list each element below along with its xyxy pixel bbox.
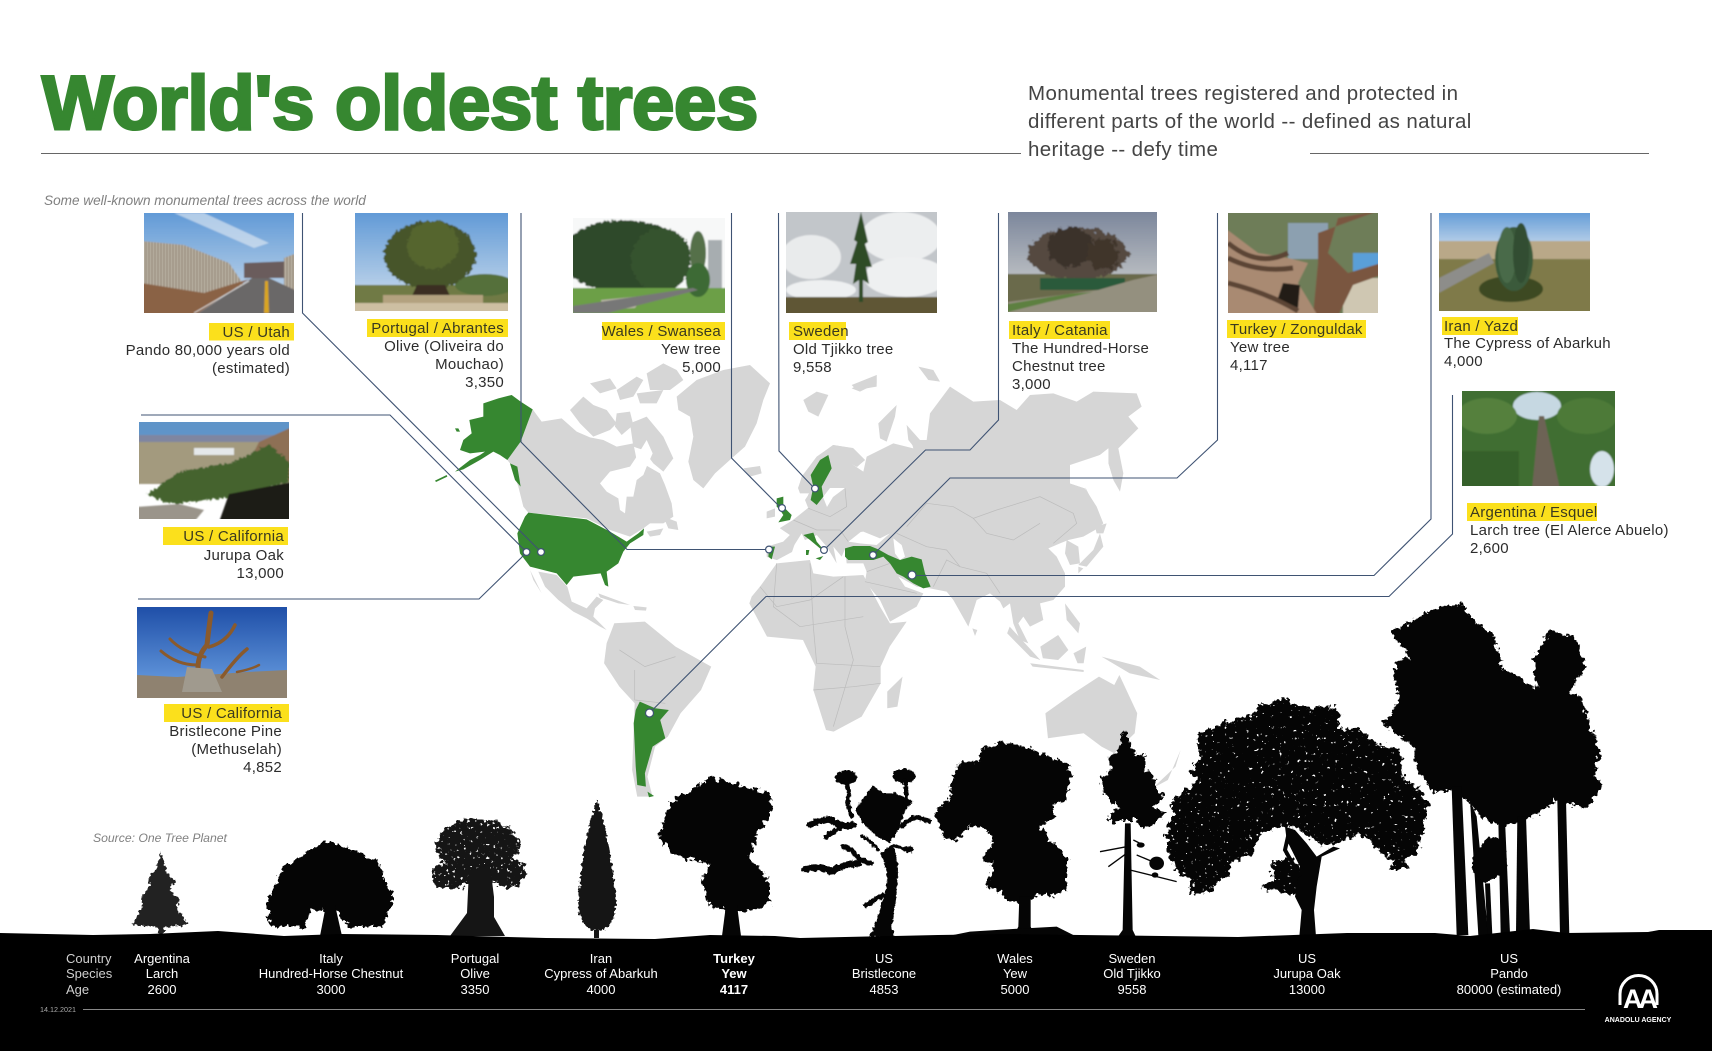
tree: Portugal olive [431,819,525,936]
panel: Wales Swansea Yew [561,215,728,376]
table: US bristlecone [852,951,916,997]
row labels [66,951,113,997]
tree details: Larch tree (El Alerce Abuelo) [1470,522,1669,539]
photo: Hundred-Horse Chestnut [1008,212,1157,312]
panel: US California Bristlecone [137,607,289,776]
table: US bristlecone: Bristlecone [852,966,916,981]
table: Iran [544,951,658,997]
table: Sweden: 9558 [1118,982,1146,997]
table: Turkey [713,951,756,997]
tree: Wales yew [935,742,1080,938]
place tag [1009,321,1110,339]
panel: US California Jurupa Oak: US / California [183,528,284,545]
photo: yew tree [573,218,725,313]
table: Turkey: 4117 [720,982,748,997]
photo: yew trunk [1228,213,1378,313]
tree silhouettes [132,603,1603,938]
panel: Argentina Esquel Larch [1457,388,1669,557]
tree details: Yew tree [1230,339,1290,356]
table: Wales: Wales [997,951,1033,966]
panel: Turkey Zonguldak Yew: 4,117 [1230,357,1268,374]
tree details: Yew tree [661,341,721,358]
table: US Jurupa: 13000 [1289,982,1325,997]
table: Sweden: Sweden [1109,951,1155,966]
logo: Anadolu Agency [1605,976,1672,1024]
panel: Italy Catania Chestnut [1005,209,1160,393]
ground band [0,929,1712,1051]
panel: Sweden Old Tjikko: 9,558 [793,359,832,376]
tree: US Pando [1383,603,1603,935]
title: World's oldest trees [42,61,758,146]
tree details: The Hundred-Horse [1012,340,1149,357]
place tag [1227,320,1366,338]
panel: Argentina Esquel Larch: Argentina / Esquel [1470,504,1597,521]
panel: Sweden Old Tjikko: Sweden [793,323,849,340]
table: Argentina: Argentina [134,951,191,966]
tree: Italy chestnut [267,840,393,936]
panel: Iran Yazd Cypress: 4,000 [1444,353,1483,370]
photo: Methuselah bristlecone pine [137,607,287,698]
table: US Pando [1457,951,1561,997]
map pins [523,485,916,717]
photo: Jurupa hills [139,422,289,519]
tree details: Old Tjikko tree [793,341,893,358]
connector lines [138,213,1452,713]
map subtitle: Some well-known monumental trees across the world [44,193,366,208]
logo: Anadolu Agency: ANADOLU AGENCY [1605,1017,1672,1024]
table: Portugal: Olive [460,966,490,981]
panel: US California Jurupa Oak: 13,000 [236,565,284,582]
intro text: different parts of the world -- defined as natural [1028,110,1472,133]
place tag [1442,317,1518,335]
row labels: Species [66,966,113,981]
table: US Jurupa [1273,951,1341,997]
panel: US California Bristlecone: (Methuselah) [191,741,282,758]
table: Portugal: Portugal [451,951,499,966]
tree: Argentina larch [132,852,189,935]
panel: Italy Catania Chestnut: 3,000 [1012,376,1051,393]
panel: Wales Swansea Yew: 5,000 [682,359,721,376]
table: Iran: Iran [590,951,612,966]
table: Italy: 3000 [317,982,345,997]
intro text: heritage -- defy time [1028,138,1218,161]
panel: Wales Swansea Yew: Wales / Swansea [602,323,721,340]
header rule left [41,152,1021,154]
table: US Jurupa: US [1298,951,1316,966]
panel: US California Bristlecone: 4,852 [243,759,282,776]
place tag [209,323,294,340]
panel: Italy Catania Chestnut: Italy / Catania [1012,322,1108,339]
tree: US bristlecone [805,769,929,937]
table: Italy: Hundred-Horse Chestnut [259,966,404,981]
table: US Pando: US [1500,951,1518,966]
tree: Turkey yew [658,777,772,936]
table: Sweden [1103,951,1161,997]
tree: US Jurupa oak [1167,698,1428,937]
panel: Argentina Esquel Larch: 2,600 [1470,540,1509,557]
source note: Source: One Tree Planet [93,831,228,845]
table: Portugal: 3350 [461,982,489,997]
intro text: Monumental trees registered and protected in [1028,82,1458,105]
panel: Turkey Zonguldak Yew [1225,210,1381,374]
table: Argentina: 2600 [148,982,176,997]
panel: Portugal Abrantes Olive: 3,350 [465,374,504,391]
table: Portugal [451,951,499,997]
table: Iran: Cypress of Abarkuh [544,966,658,981]
table: Wales: 5000 [1001,982,1029,997]
date: 14.12.2021 [40,1005,76,1014]
table: Wales: Yew [1003,966,1028,981]
table: Sweden: Old Tjikko [1103,966,1161,981]
panel: Turkey Zonguldak Yew: Turkey / Zonguldak [1230,321,1363,338]
panel: Portugal Abrantes Olive: Mouchao) [435,356,504,373]
photo: Pando aspen grove [144,213,294,313]
table: US Pando: Pando [1490,966,1528,981]
tree: Iran cypress [578,800,616,938]
footer rule [83,1008,1585,1010]
place tag [164,704,289,722]
tree details: Jurupa Oak [204,547,284,564]
table: US Pando: 80000 (estimated) [1457,982,1561,997]
table: Turkey: Turkey [713,951,756,966]
photo: Old Tjikko spruce [786,212,937,313]
table: Italy [259,951,404,997]
table: Argentina [134,951,191,997]
table: Argentina: Larch [146,966,178,981]
panel: Iran Yazd Cypress [1436,210,1611,370]
place tag [789,322,846,340]
row labels: Age [66,982,89,997]
intro text [1028,82,1472,161]
tree details: The Cypress of Abarkuh [1444,335,1611,352]
panel: US California Jurupa Oak [136,419,292,582]
table: US Jurupa: Jurupa Oak [1273,966,1341,981]
logo: Anadolu Agency: AA [1623,984,1657,1014]
table: Turkey: Yew [721,966,748,981]
panel: US Utah Pando: (estimated) [212,360,290,377]
place tag [367,319,508,337]
place tag [602,322,725,340]
tree: Sweden spruce [1100,730,1177,938]
place tag [1467,503,1597,521]
header rule right [1310,152,1649,154]
table: Italy: Italy [319,951,343,966]
table: US bristlecone: US [875,951,893,966]
panel: US Utah Pando: US / Utah [223,324,290,341]
photo: olive tree [355,213,508,311]
panel: Portugal Abrantes Olive: Portugal / Abrantes [371,320,504,337]
panel: Sweden Old Tjikko [781,209,948,376]
photo: Cypress of Abarkuh [1439,213,1590,311]
table: US bristlecone: 4853 [870,982,898,997]
tree details: Olive (Oliveira do [384,338,504,355]
photo: El Alerce Abuelo [1462,391,1615,486]
world map [435,363,1181,797]
table: Iran: 4000 [587,982,615,997]
panel: US Utah Pando [126,210,297,377]
row labels: Country [66,951,112,966]
tree details: Pando 80,000 years old [126,342,290,359]
panel: Portugal Abrantes Olive [352,210,515,391]
tree details: Bristlecone Pine [169,723,282,740]
place tag [163,527,288,545]
panel: US California Bristlecone: US / California [181,705,282,722]
panel: Iran Yazd Cypress: Iran / Yazd [1444,318,1518,335]
table: Wales [997,951,1033,997]
panel: Italy Catania Chestnut: Chestnut tree [1012,358,1106,375]
